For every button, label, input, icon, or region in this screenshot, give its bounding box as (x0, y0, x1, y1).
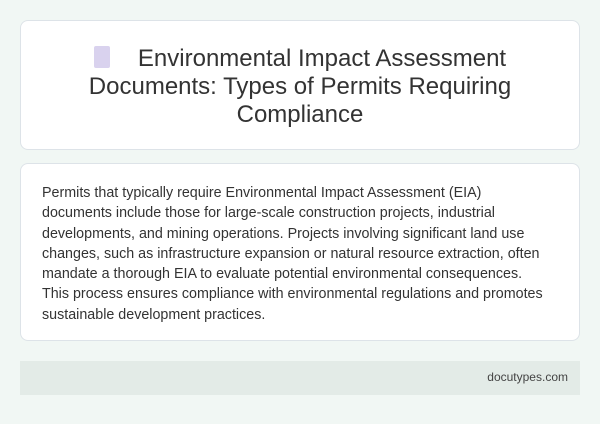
footer text: docutypes.com (487, 370, 568, 384)
title: Environmental Impact Assessment Documents: Types of Permits Requiring Compliance (89, 45, 511, 128)
icon: document (94, 46, 110, 68)
description text: Permits that typically require Environmental Impact Assessment (EIA) documents include those for large-scale construction projects, industrial developments, and mining operations. Projects involving significant land use changes, such as infrastructure expansion or natural resource extraction, often mandate a thorough EIA to evaluate potential environmental consequences. This process ensures compliance with environmental regulations and promotes sustainable development practices. (42, 185, 543, 323)
footer (20, 361, 580, 395)
description card (20, 163, 580, 341)
title card (20, 20, 580, 150)
